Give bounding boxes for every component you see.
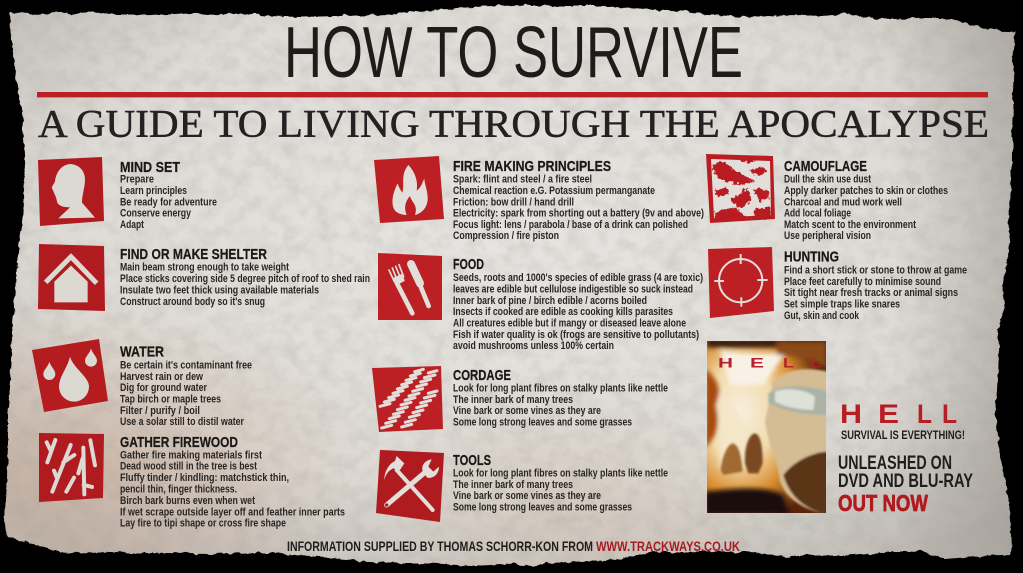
hell logo: H [840, 399, 862, 429]
panel: food [378, 253, 703, 352]
text block: water: Tap birch or maple trees [120, 394, 221, 406]
poster title: L [783, 354, 795, 370]
heading: tools: TOOLS [453, 453, 491, 469]
text block: tools [453, 468, 668, 514]
text block: water: Use a solar still to distil water [120, 416, 245, 428]
title: HOW TO SURVIVE [284, 13, 743, 93]
text block: water: Be certain it's contaminant free [120, 359, 252, 371]
text block: food: All creatures edible but if mangy or diseased leave alone [453, 318, 686, 330]
release text [838, 452, 973, 492]
text block: camouflage [784, 174, 948, 242]
heading: hunting: HUNTING [784, 250, 839, 266]
text block: water: Dig for ground water [120, 382, 208, 394]
text block: fire making: Electricity: spark from shorting out a battery (9v and above) [453, 208, 704, 220]
subtitle: A GUIDE TO LIVING THROUGH THE APOCALYPSE [38, 102, 989, 146]
panel: fire making [374, 156, 704, 242]
text block: mind set: Conserve energy [120, 208, 192, 220]
text block: firewood: pencil thin, finger thickness. [120, 484, 237, 496]
text block: tools: Look for long plant fibres on stalky plants like nettle [453, 468, 668, 480]
icon: crosshair [708, 247, 774, 318]
text block: food: Inner bark of pine / birch edible / acorns boiled [453, 295, 647, 307]
hell logo: L [942, 399, 957, 429]
text block: cordage: Some long strong leaves and some grasses [453, 417, 632, 429]
text block: mind set: Adapt [120, 219, 144, 231]
icon: knife and fork [378, 253, 442, 320]
heading: camouflage: CAMOUFLAGE [784, 159, 867, 175]
movie promo [838, 399, 973, 516]
release text: UNLEASHED ON [838, 452, 952, 474]
icon: house [38, 244, 105, 311]
text block: cordage [453, 383, 668, 429]
heading: shelter: FIND OR MAKE SHELTER [120, 247, 267, 263]
text block: camouflage: Match scent to the environment [784, 219, 916, 231]
text block: fire making: Chemical reaction e.G. Potassium permanganate [453, 185, 655, 197]
hell logo [840, 399, 957, 429]
text block: camouflage: Use peripheral vision [784, 230, 871, 242]
text block: firewood: Gather fire making materials first [120, 449, 262, 461]
text block: fire making: Spark: flint and steel / a fire steel [453, 174, 592, 186]
poster title: E [750, 354, 764, 370]
text block: food: leaves are edible but cellulose indigestible so suck instead [453, 284, 693, 296]
text block: fire making: Compression / fire piston [453, 230, 559, 242]
text block: fire making: Friction: bow drill / hand drill [453, 196, 574, 208]
icon: sticks [39, 433, 104, 502]
text block: fire making: Focus light: lens / parabola / base of a drink can polished [453, 219, 688, 231]
red rule [37, 92, 988, 97]
text block: water [120, 359, 252, 428]
text block: hunting [784, 265, 967, 322]
text block: hunting: Sit tight near fresh tracks or animal signs [784, 287, 958, 299]
hell logo: E [878, 399, 899, 429]
icon: rope [372, 366, 443, 432]
release text: DVD AND BLU-RAY [838, 470, 973, 492]
text block: firewood: If wet scrape outside layer off and feather inner parts [120, 506, 345, 518]
panel: hunting [708, 247, 967, 322]
footer credit: INFORMATION SUPPLIED BY THOMAS SCHORR-KON FROM [287, 538, 593, 554]
text block: food: Fish if water quality is ok (frogs are sensitive to pollutants) [453, 329, 699, 341]
text block: firewood: Dead wood still in the tree is best [120, 461, 257, 473]
text block: firewood [120, 449, 345, 530]
text block: food: Seeds, roots and 1000's species of edible grass (4 are toxic) [453, 272, 703, 284]
text block: tools: The inner bark of many trees [453, 479, 573, 491]
heading: firewood: GATHER FIREWOOD [120, 435, 238, 451]
poster title: H [718, 354, 733, 370]
text block: mind set: Learn principles [120, 185, 187, 197]
heading: mind set: MIND SET [120, 160, 180, 176]
text block: tools: Vine bark or some vines as they are [453, 490, 601, 502]
text block: shelter: Construct around body so it's snug [120, 296, 265, 308]
text block: camouflage: Charcoal and mud work well [784, 196, 902, 208]
hell logo: L [917, 399, 932, 429]
icon: hammer and wrench [376, 450, 444, 522]
text block: water: Filter / purify / boil [120, 405, 200, 417]
text block: cordage: Look for long plant fibres on stalky plants like nettle [453, 383, 668, 395]
panel: mind set [38, 157, 217, 231]
heading: cordage: CORDAGE [453, 368, 511, 384]
out now: OUT NOW [838, 490, 928, 516]
text block: food: avoid mushrooms unless 100% certain [453, 340, 614, 352]
panel: shelter [38, 244, 370, 311]
text block: shelter: Insulate two feet thick using available materials [120, 285, 319, 297]
text block: food [453, 272, 703, 352]
text block: camouflage: Apply darker patches to skin or clothes [784, 185, 948, 197]
text block: hunting: Place feet carefully to minimise sound [784, 276, 941, 288]
panel: camouflage [706, 154, 948, 242]
text block: mind set: Be ready for adventure [120, 196, 217, 208]
text block: mind set [120, 174, 217, 231]
text block: mind set: Prepare [120, 174, 154, 186]
text block: firewood: Fluffy tinder / kindling: matchstick thin, [120, 472, 289, 484]
icon: water drops [32, 339, 108, 412]
text block: hunting: Gut, skin and cook [784, 310, 860, 322]
icon: flame [374, 156, 444, 223]
heading: water: WATER [120, 345, 164, 361]
tagline: SURVIVAL IS EVERYTHING! [841, 428, 965, 442]
text block: water: Harvest rain or dew [120, 371, 203, 383]
text block: camouflage: Add local foliage [784, 208, 851, 220]
icon: camouflage pattern [706, 154, 775, 223]
text block: food: Insects if cooked are edible as cooking kills parasites [453, 306, 673, 318]
text block: firewood: Birch bark burns even when wet [120, 495, 255, 507]
panel: water [32, 339, 252, 428]
heading: fire making: FIRE MAKING PRINCIPLES [453, 159, 611, 175]
poster title: L [810, 354, 822, 370]
poster title [719, 358, 820, 368]
icon: head silhouette [38, 157, 104, 226]
panel: cordage [372, 366, 668, 432]
text block: hunting: Find a short stick or stone to throw at game [784, 265, 967, 277]
text block: cordage: The inner bark of many trees [453, 394, 573, 406]
footer credit: WWW.TRACKWAYS.CO.UK [596, 538, 740, 554]
text block: tools: Some long strong leaves and some grasses [453, 502, 632, 514]
panel: tools [376, 450, 668, 522]
heading: food: FOOD [453, 257, 484, 273]
movie poster [705, 338, 828, 515]
text block: shelter: Place sticks covering side 5 degree pitch of roof to shed rain [120, 273, 370, 285]
text block: cordage: Vine bark or some vines as they are [453, 405, 601, 417]
text block: shelter [120, 262, 370, 308]
panel: firewood [39, 433, 345, 530]
text block: fire making [453, 174, 704, 242]
text block: camouflage: Dull the skin use dust [784, 174, 871, 186]
text block: shelter: Main beam strong enough to take weight [120, 262, 289, 274]
text block: hunting: Set simple traps like snares [784, 299, 900, 311]
text block: firewood: Lay fire to tipi shape or cross fire shape [120, 518, 286, 530]
